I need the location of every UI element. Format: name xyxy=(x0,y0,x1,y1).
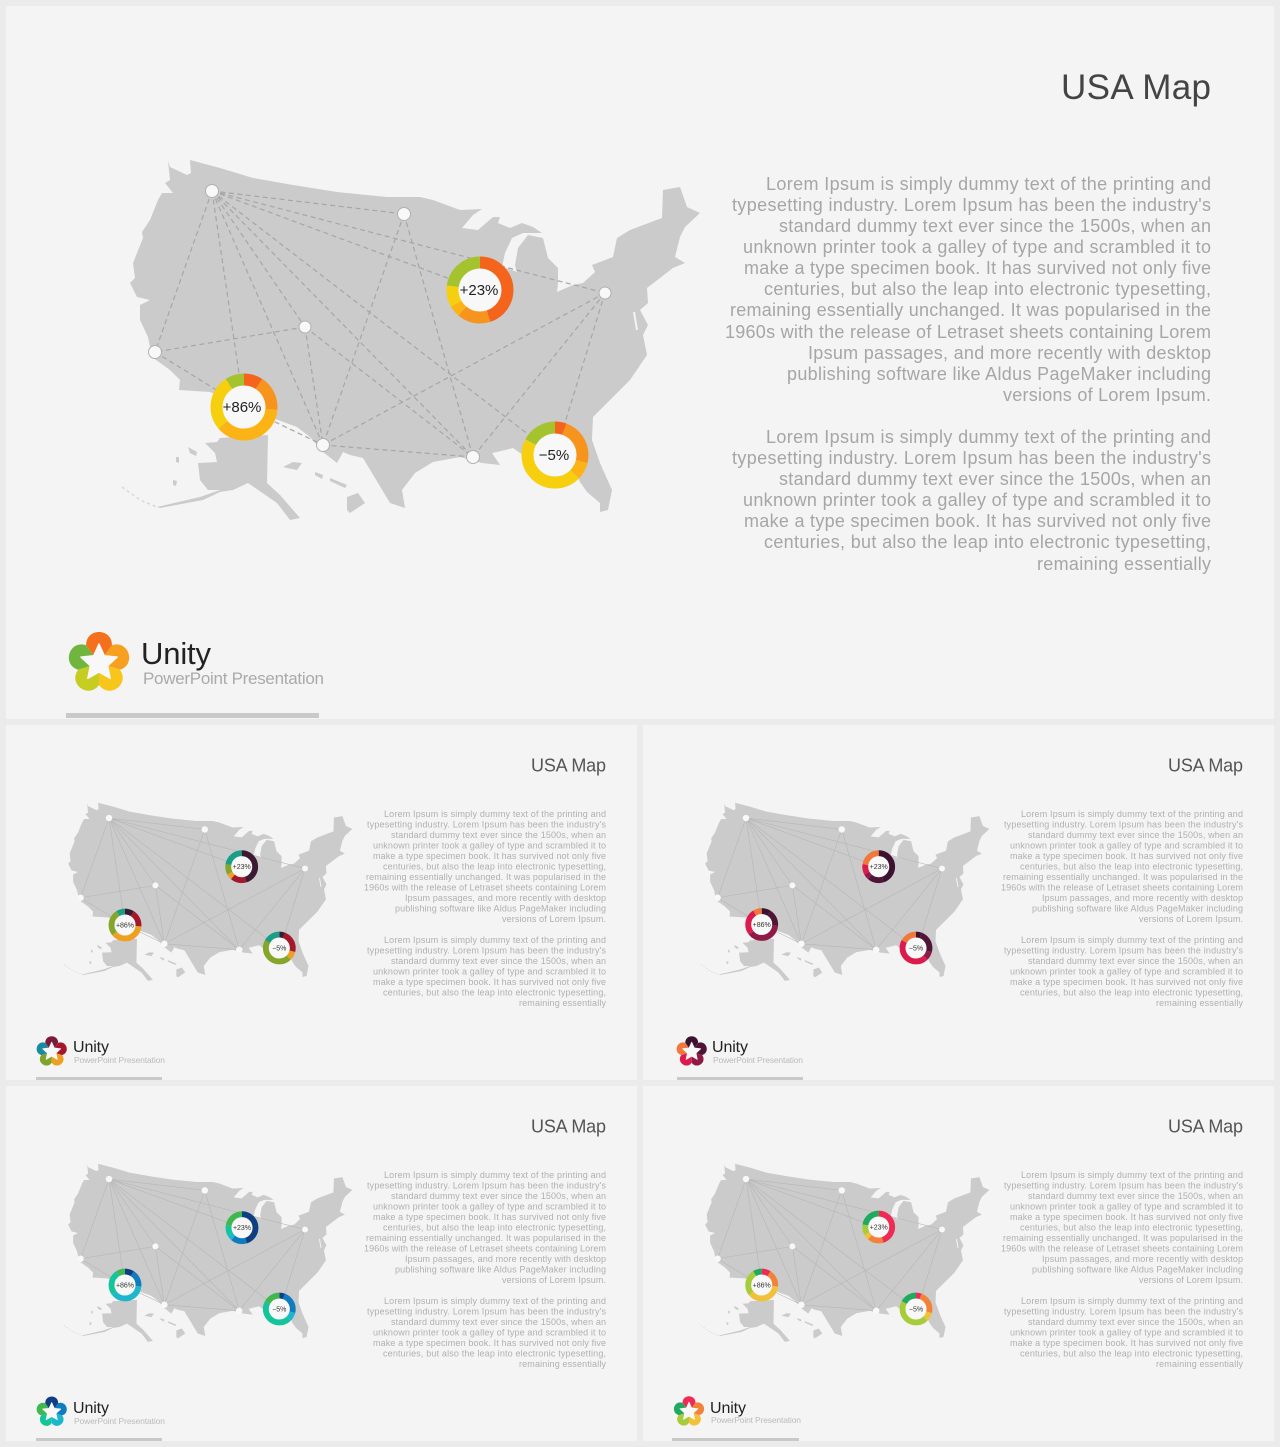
title: USA Map xyxy=(531,1116,606,1136)
panel: mini slide, rainbow palette xyxy=(643,1086,1274,1441)
slide background xyxy=(643,1086,1274,1441)
slide background xyxy=(6,6,1274,719)
donut: +23% xyxy=(865,1214,892,1240)
slide background xyxy=(6,725,637,1080)
footer bar xyxy=(66,713,319,718)
body text: publishing software like Aldus PageMaker including xyxy=(395,904,606,914)
panel: mini slide, crimson palette xyxy=(643,725,1274,1080)
label: −5%: −5% xyxy=(909,946,923,952)
donut: +86%: +86% xyxy=(223,399,261,416)
body text: Ipsum passages, and more recently with desktop xyxy=(808,343,1211,363)
body text: remaining essentially unchanged. It was popularised in the xyxy=(1003,872,1243,882)
body text: remaining essentially xyxy=(519,998,606,1008)
body text xyxy=(364,1170,606,1369)
panel: mini slide, teal and maroon palette xyxy=(6,725,637,1080)
body text: typesetting industry. Lorem Ipsum has been the industry's xyxy=(732,448,1211,468)
donut: +23% xyxy=(228,853,255,880)
logo tagline: PowerPoint Presentation xyxy=(711,1415,801,1425)
body text: 1960s with the release of Letraset sheets containing Lorem xyxy=(725,322,1211,342)
panel: mini slide, blue and green palette xyxy=(6,1086,637,1441)
body text: standard dummy text ever since the 1500s, when an xyxy=(1028,1191,1243,1201)
footer bar xyxy=(36,1077,162,1080)
body text: Ipsum passages, and more recently with desktop xyxy=(1042,893,1243,903)
donut: +86% xyxy=(112,1272,138,1298)
body text: typesetting industry. Lorem Ipsum has been the industry's xyxy=(367,946,606,956)
logo tagline: PowerPoint Presentation xyxy=(74,1416,165,1426)
body text: publishing software like Aldus PageMaker including xyxy=(1032,1264,1243,1274)
panel: main slide xyxy=(6,6,1274,719)
body text: versions of Lorem Ipsum. xyxy=(1139,914,1243,924)
body text: centuries, but also the leap into electronic typesetting, xyxy=(764,532,1211,552)
USA map with connection network xyxy=(64,1164,352,1342)
body text: Lorem Ipsum is simply dummy text of the printing and xyxy=(1021,1296,1243,1306)
body text: standard dummy text ever since the 1500s, when an xyxy=(1028,830,1243,840)
body text: make a type specimen book. It has survived not only five xyxy=(373,977,606,987)
logo name: Unity xyxy=(710,1400,746,1417)
donut: +86% xyxy=(748,1272,775,1298)
donut: +23% xyxy=(865,853,892,880)
body text: Ipsum passages, and more recently with desktop xyxy=(1042,1254,1243,1264)
logo icon xyxy=(35,1036,68,1068)
body text: versions of Lorem Ipsum. xyxy=(1003,385,1211,405)
donut: −5%: −5% xyxy=(539,447,569,464)
body text: Lorem Ipsum is simply dummy text of the printing and xyxy=(384,935,606,945)
body text xyxy=(725,174,1211,574)
logo name: Unity xyxy=(73,1039,109,1056)
body text: standard dummy text ever since the 1500s, when an xyxy=(391,956,606,966)
body text: remaining essentially xyxy=(519,1359,606,1369)
body text: make a type specimen book. It has survived not only five xyxy=(1010,851,1243,861)
body text: versions of Lorem Ipsum. xyxy=(1139,1275,1243,1285)
USA map with connection network xyxy=(122,160,700,520)
donut: +23% xyxy=(229,1214,255,1241)
body text: standard dummy text ever since the 1500s, when an xyxy=(1028,956,1243,966)
body text: 1960s with the release of Letraset sheets containing Lorem xyxy=(364,1244,606,1254)
footer bar xyxy=(36,1438,162,1441)
body text: Lorem Ipsum is simply dummy text of the printing and xyxy=(1021,1170,1243,1180)
title: USA Map xyxy=(1168,1116,1243,1136)
logo tagline: PowerPoint Presentation xyxy=(74,1055,165,1065)
body text: typesetting industry. Lorem Ipsum has been the industry's xyxy=(1004,1306,1244,1316)
logo name: Unity xyxy=(712,1039,748,1056)
body text: publishing software like Aldus PageMaker including xyxy=(395,1264,606,1274)
body text: Lorem Ipsum is simply dummy text of the printing and xyxy=(766,174,1211,194)
donut: −5% xyxy=(528,428,582,482)
logo tagline: PowerPoint Presentation xyxy=(713,1055,803,1065)
body text: standard dummy text ever since the 1500s, when an xyxy=(779,469,1211,489)
body text: unknown printer took a galley of type and scrambled it to xyxy=(743,237,1211,257)
slide background xyxy=(643,725,1274,1080)
donut: +23% xyxy=(452,262,508,318)
body text: versions of Lorem Ipsum. xyxy=(502,1275,606,1285)
body text: centuries, but also the leap into electronic typesetting, xyxy=(1020,1348,1243,1358)
logo icon xyxy=(66,632,132,696)
logo name: Unity xyxy=(141,636,212,671)
body text: 1960s with the release of Letraset sheets containing Lorem xyxy=(1001,882,1243,892)
title: USA Map xyxy=(1061,68,1211,107)
body text: unknown printer took a galley of type and scrambled it to xyxy=(1010,966,1243,976)
body text: remaining essentially unchanged. It was popularised in the xyxy=(730,300,1211,320)
body text: typesetting industry. Lorem Ipsum has been the industry's xyxy=(1004,820,1244,830)
logo icon xyxy=(672,1396,706,1428)
donut: +86% xyxy=(748,911,775,938)
body text: typesetting industry. Lorem Ipsum has been the industry's xyxy=(367,1180,606,1190)
body text: make a type specimen book. It has survived not only five xyxy=(744,258,1211,278)
body text: centuries, but also the leap into electronic typesetting, xyxy=(1020,862,1243,872)
body text: make a type specimen book. It has survived not only five xyxy=(373,1212,606,1222)
logo icon xyxy=(675,1036,708,1068)
body text xyxy=(364,809,606,1008)
donut: −5% xyxy=(903,935,929,961)
body text: 1960s with the release of Letraset sheets containing Lorem xyxy=(1001,1244,1243,1254)
body text: centuries, but also the leap into electronic typesetting, xyxy=(383,1348,606,1358)
label: +23%: +23% xyxy=(870,1224,888,1232)
body text: centuries, but also the leap into electronic typesetting, xyxy=(764,279,1211,299)
logo tagline: PowerPoint Presentation xyxy=(143,669,324,688)
body text: standard dummy text ever since the 1500s, when an xyxy=(1028,1317,1243,1327)
body text: 1960s with the release of Letraset sheets containing Lorem xyxy=(364,882,606,892)
body text: unknown printer took a galley of type and scrambled it to xyxy=(743,490,1211,510)
body text: Ipsum passages, and more recently with desktop xyxy=(405,893,606,903)
body text: make a type specimen book. It has survived not only five xyxy=(1010,1338,1243,1348)
body text: Lorem Ipsum is simply dummy text of the printing and xyxy=(766,427,1211,447)
body text: typesetting industry. Lorem Ipsum has been the industry's xyxy=(367,820,606,830)
label: −5%: −5% xyxy=(272,946,286,952)
title: USA Map xyxy=(1168,756,1243,776)
body text: standard dummy text ever since the 1500s, when an xyxy=(779,216,1211,236)
body text: remaining essentially unchanged. It was popularised in the xyxy=(1003,1233,1243,1243)
label: −5%: −5% xyxy=(272,1306,286,1314)
body text: centuries, but also the leap into electronic typesetting, xyxy=(1020,1222,1243,1232)
label: +86%: +86% xyxy=(753,922,771,929)
body text: Lorem Ipsum is simply dummy text of the printing and xyxy=(384,809,606,819)
body text: unknown printer took a galley of type and scrambled it to xyxy=(1010,1202,1243,1212)
body text: Lorem Ipsum is simply dummy text of the printing and xyxy=(1021,809,1243,819)
body text: remaining essentially xyxy=(1037,554,1211,574)
body text: remaining essentially xyxy=(1156,998,1244,1008)
body text: unknown printer took a galley of type and scrambled it to xyxy=(1010,1328,1243,1338)
body text: make a type specimen book. It has survived not only five xyxy=(744,511,1211,531)
donut: −5% xyxy=(266,1296,293,1322)
label: +23%: +23% xyxy=(233,1225,251,1232)
label: +86%: +86% xyxy=(116,922,134,930)
body text: Lorem Ipsum is simply dummy text of the printing and xyxy=(384,1296,606,1306)
body text: Lorem Ipsum is simply dummy text of the printing and xyxy=(384,1170,606,1180)
label: +23%: +23% xyxy=(870,864,888,871)
body text: centuries, but also the leap into electronic typesetting, xyxy=(383,862,606,872)
label: +86%: +86% xyxy=(753,1282,771,1290)
body text: versions of Lorem Ipsum. xyxy=(502,914,606,924)
donut: +23%: +23% xyxy=(460,282,498,299)
label: +23%: +23% xyxy=(233,864,251,871)
body text: centuries, but also the leap into electronic typesetting, xyxy=(1020,988,1243,998)
body text: make a type specimen book. It has survived not only five xyxy=(373,851,606,861)
footer bar xyxy=(672,1438,799,1441)
logo icon xyxy=(35,1396,68,1428)
label: −5%: −5% xyxy=(909,1306,923,1314)
slide background xyxy=(6,1086,637,1441)
body text: unknown printer took a galley of type and scrambled it to xyxy=(373,966,606,976)
body text xyxy=(1001,809,1244,1008)
USA map with connection network xyxy=(701,1164,989,1342)
body text: standard dummy text ever since the 1500s, when an xyxy=(391,830,606,840)
body text: make a type specimen book. It has survived not only five xyxy=(1010,977,1243,987)
donut: −5% xyxy=(266,935,293,961)
USA map with connection network xyxy=(64,803,352,981)
body text: Lorem Ipsum is simply dummy text of the printing and xyxy=(1021,935,1243,945)
body text: remaining essentially unchanged. It was popularised in the xyxy=(366,1233,606,1243)
body text: make a type specimen book. It has survived not only five xyxy=(373,1338,606,1348)
body text: publishing software like Aldus PageMaker including xyxy=(1032,904,1243,914)
body text: publishing software like Aldus PageMaker including xyxy=(787,364,1211,384)
body text: remaining essentially xyxy=(1156,1359,1244,1369)
donut: +86% xyxy=(216,380,272,434)
body text: standard dummy text ever since the 1500s, when an xyxy=(391,1317,606,1327)
body text: centuries, but also the leap into electronic typesetting, xyxy=(383,988,606,998)
logo name: Unity xyxy=(73,1400,109,1417)
footer bar xyxy=(677,1077,803,1080)
body text: make a type specimen book. It has survived not only five xyxy=(1010,1212,1243,1222)
body text xyxy=(1001,1170,1244,1369)
USA map with connection network xyxy=(701,803,989,981)
label: +86%: +86% xyxy=(116,1282,134,1290)
body text: typesetting industry. Lorem Ipsum has been the industry's xyxy=(732,195,1211,215)
donut: +86% xyxy=(112,912,138,938)
body text: standard dummy text ever since the 1500s, when an xyxy=(391,1191,606,1201)
body text: Ipsum passages, and more recently with desktop xyxy=(405,1254,606,1264)
body text: typesetting industry. Lorem Ipsum has been the industry's xyxy=(1004,946,1244,956)
title: USA Map xyxy=(531,756,606,776)
body text: unknown printer took a galley of type and scrambled it to xyxy=(373,1202,606,1212)
donut: −5% xyxy=(903,1296,929,1322)
body text: remaining essentially unchanged. It was popularised in the xyxy=(366,872,606,882)
body text: unknown printer took a galley of type and scrambled it to xyxy=(373,840,606,850)
body text: centuries, but also the leap into electronic typesetting, xyxy=(383,1222,606,1232)
body text: unknown printer took a galley of type and scrambled it to xyxy=(373,1328,606,1338)
body text: typesetting industry. Lorem Ipsum has been the industry's xyxy=(1004,1180,1244,1190)
body text: typesetting industry. Lorem Ipsum has been the industry's xyxy=(367,1306,606,1316)
body text: unknown printer took a galley of type and scrambled it to xyxy=(1010,840,1243,850)
